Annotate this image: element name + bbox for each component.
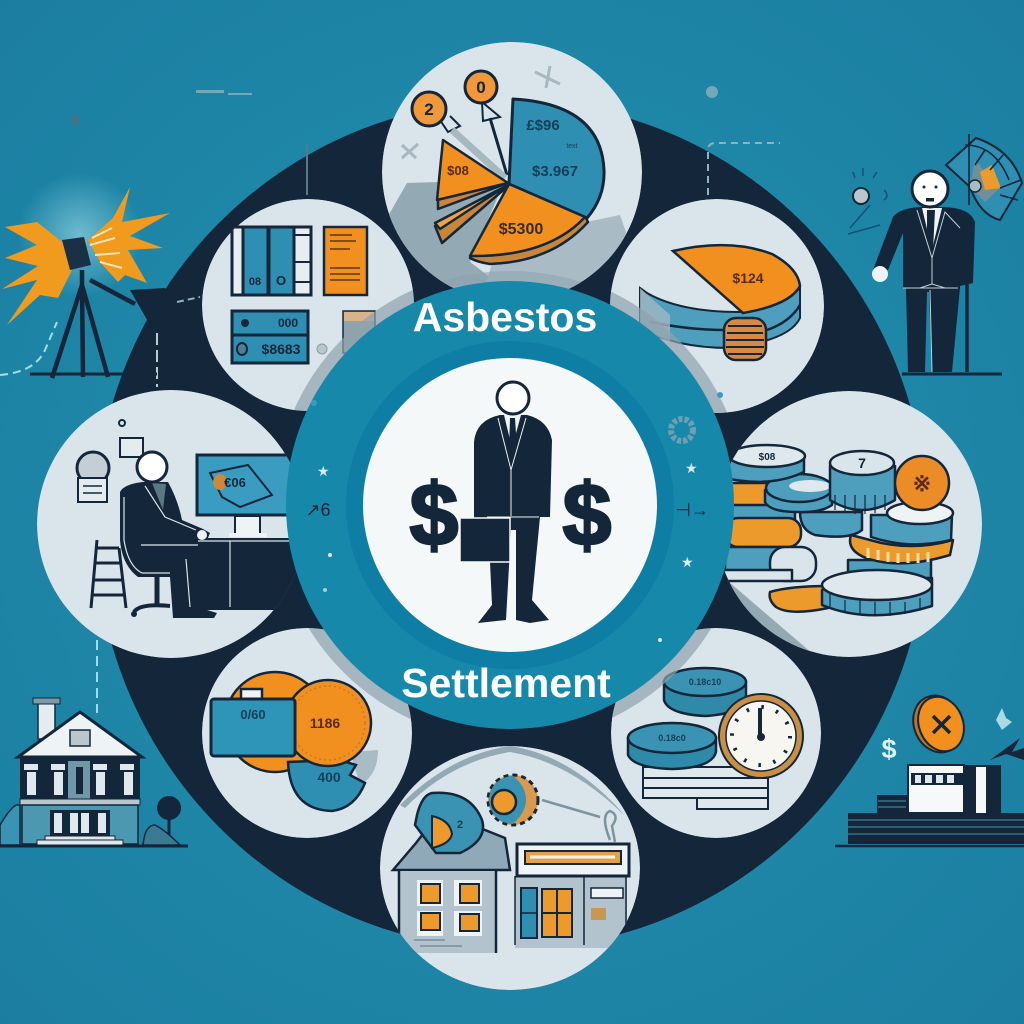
pie base (640, 285, 800, 348)
orange small coin (770, 586, 828, 612)
building (908, 765, 964, 813)
panel: top pie chart: 2 (424, 100, 434, 119)
right stack (871, 515, 952, 544)
panel: sliced coin pie: $124 (732, 270, 764, 286)
stars: ★ (681, 554, 694, 570)
panel: piles of coins: ※ (913, 471, 931, 496)
big bottom coin (822, 578, 932, 615)
panel: top pie chart (382, 42, 642, 289)
stars: ★ (317, 463, 330, 479)
wall note (120, 438, 143, 457)
panel: briefcase and coins: 400 (317, 769, 341, 785)
gray shadow (352, 750, 378, 782)
monitor (196, 454, 290, 537)
orange document (324, 227, 367, 295)
panel: sliced coin pie (610, 199, 824, 413)
panel: top pie chart: $5300 (499, 221, 543, 238)
panel: clock and coins (611, 628, 821, 838)
coins (230, 670, 309, 774)
panel: clock and coins: 0.18c0 (658, 733, 686, 743)
panel: briefcase and coins: 1186 (310, 715, 340, 731)
clock (719, 694, 803, 778)
stars (311, 392, 723, 642)
left burst (2, 222, 72, 325)
panel: briefcase and coins (202, 628, 412, 838)
title: Asbestos: Asbestos (413, 294, 597, 340)
panel: top pie chart: $3.967 (532, 163, 578, 180)
ring connector lines (157, 143, 780, 387)
data card: $8683 (262, 341, 301, 357)
title: Settlement: Settlement (401, 660, 611, 706)
orange coin (895, 456, 949, 510)
panel: top pie chart: £$96 (526, 117, 560, 134)
right burst (88, 187, 170, 283)
connector (96, 640, 98, 713)
middle coins (800, 512, 862, 537)
lower coin (628, 723, 716, 769)
decorative marks (402, 144, 418, 158)
callout pointers (440, 102, 507, 178)
monitor: €06 (224, 475, 246, 490)
camera head (62, 237, 91, 270)
tripod (52, 270, 135, 378)
left scene: house (0, 640, 188, 846)
panel: documents and binders: O (276, 273, 286, 288)
house (393, 812, 510, 953)
dark ring (95, 101, 927, 949)
binder (232, 227, 311, 295)
orange slice (673, 245, 800, 313)
panel: top pie chart: 0 (476, 78, 486, 97)
center white disc (363, 358, 657, 652)
doodle coin (853, 188, 869, 204)
gear icon on ring (671, 419, 693, 441)
briefcase (460, 518, 510, 562)
pie chart (435, 99, 604, 264)
tan box (343, 311, 375, 353)
background specks (70, 86, 718, 125)
coin with cross (905, 688, 972, 760)
panel: piles of coins: $08 (759, 452, 776, 463)
seated man (120, 452, 217, 618)
sparkle (996, 708, 1012, 730)
coin stack (724, 318, 766, 360)
gear connector (542, 800, 616, 842)
dollar glyph: $ (881, 734, 897, 764)
gauge: 2 (457, 819, 463, 831)
data card (232, 311, 308, 363)
ring glyph right: ⊣→ (675, 500, 709, 520)
upper coin (664, 668, 746, 716)
inner ring (346, 341, 674, 669)
lightning (990, 738, 1024, 760)
stacked sheets (643, 767, 768, 809)
desk (197, 538, 296, 610)
right scene: building and coin (835, 688, 1024, 846)
number badge 2 (412, 92, 446, 126)
panel: top pie chart: $08 (447, 163, 469, 178)
dollar sign left: $ (410, 465, 458, 564)
right scene: standing man (848, 134, 1022, 374)
panel: briefcase and coins: 0/60 (240, 707, 266, 722)
panel: clock and coins: 0.18c10 (689, 677, 721, 687)
man figure (873, 207, 975, 372)
panel: piles of coins (705, 391, 982, 660)
ladder (91, 540, 126, 608)
left stack (732, 482, 767, 504)
stars: ★ (685, 460, 698, 476)
central businessman (460, 382, 552, 623)
briefcase (241, 689, 262, 700)
left scene: spotlight on tripod (0, 173, 180, 378)
fan chart (946, 134, 1022, 220)
panel: man at computer (37, 390, 320, 658)
gauge (415, 793, 483, 853)
gear (488, 775, 538, 825)
stacked base (877, 795, 908, 813)
center teal disc (286, 281, 734, 729)
panel: houses and gear (380, 746, 640, 990)
panel: documents and binders: 08 (249, 276, 261, 288)
wall badge (77, 452, 109, 502)
chair (131, 575, 170, 617)
panel: documents and binders (202, 199, 414, 411)
panel: top pie chart: text (566, 143, 578, 150)
number badge 0 (465, 71, 497, 103)
dollar sign right: $ (563, 465, 611, 564)
panel: piles of coins: 7 (858, 455, 866, 471)
ring glyphs: ↗6 (305, 500, 331, 520)
data card: 000 (278, 316, 298, 330)
shop building (515, 844, 629, 948)
top left coin (725, 456, 804, 482)
